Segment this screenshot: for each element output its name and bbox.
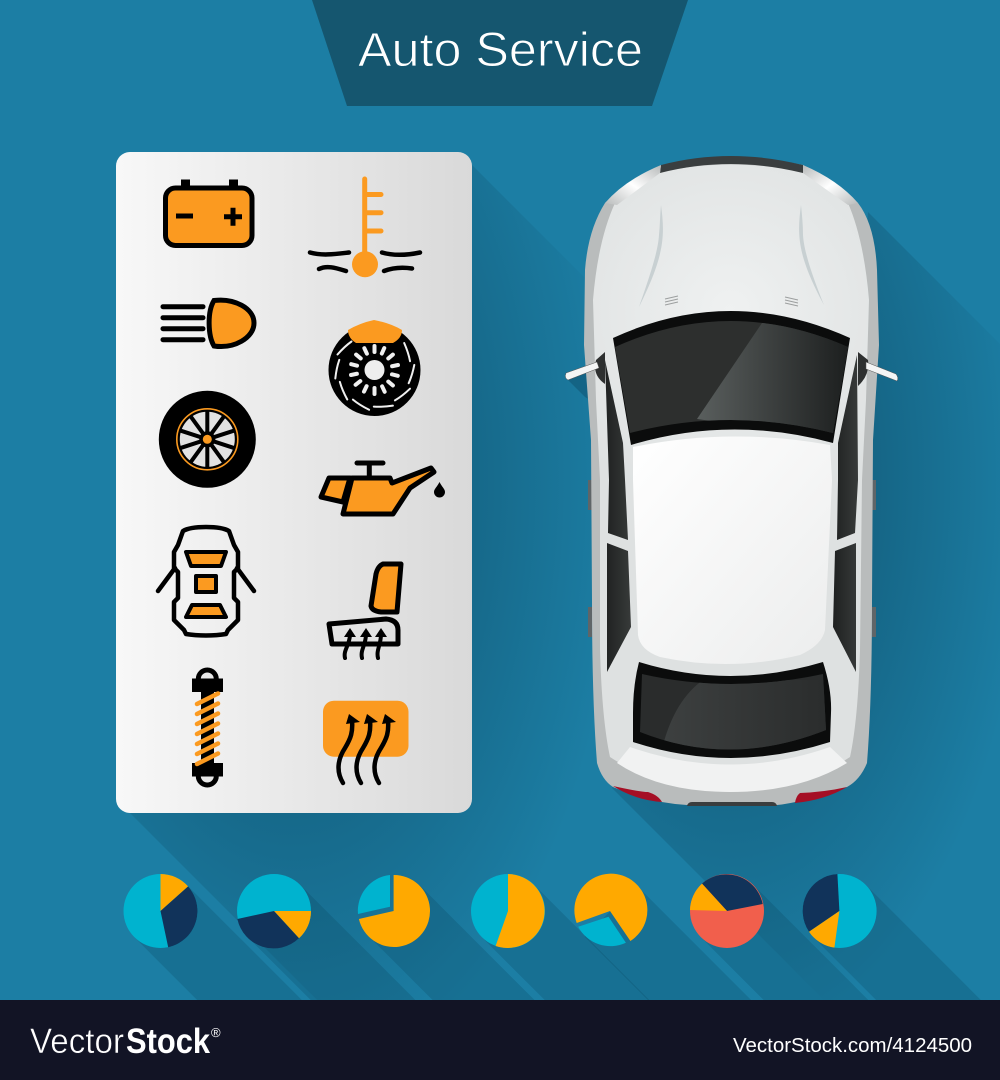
icon: rear defroster	[323, 701, 408, 783]
title banner	[312, 0, 688, 106]
right headlight	[803, 165, 858, 205]
pie chart 3	[358, 875, 430, 947]
icon: battery	[166, 180, 252, 246]
title: Auto Service	[358, 24, 643, 77]
icon: coolant temperature	[310, 179, 420, 277]
left headlight	[605, 165, 661, 205]
icon: car doors	[158, 527, 254, 636]
icon: headlight	[163, 300, 254, 346]
watermark logo: Stock	[126, 1022, 210, 1061]
icon: brake disc	[328, 320, 421, 416]
car top view	[565, 156, 898, 806]
rear bumper step	[687, 802, 777, 806]
watermark bar	[0, 1000, 1000, 1080]
pie chart 1	[124, 874, 198, 948]
windshield	[613, 311, 850, 445]
pie shadows	[160, 911, 960, 1032]
watermark url: VectorStock.com/4124500	[733, 1035, 972, 1057]
rear glass	[640, 674, 826, 750]
panel long shadow	[130, 165, 1000, 1000]
left mirror	[565, 362, 599, 380]
pie chart 6	[690, 874, 764, 948]
icon: oil can	[321, 463, 445, 514]
right tail light	[795, 787, 847, 803]
windshield glass	[615, 321, 848, 433]
left pillar windows	[605, 360, 631, 672]
watermark logo: Vector	[30, 1022, 124, 1061]
windshield glare	[697, 323, 848, 432]
car body	[584, 158, 879, 805]
pie chart 7	[803, 874, 877, 948]
left mirror shadow	[566, 370, 590, 400]
right mirror	[866, 362, 898, 381]
rear deck	[617, 747, 847, 792]
right mirror base	[858, 352, 868, 386]
icon: heated seat	[329, 564, 401, 658]
car lighter body	[593, 164, 869, 792]
left tail light	[613, 786, 662, 802]
watermark logo: ®	[211, 1025, 221, 1040]
front grille	[660, 156, 803, 173]
icon: shock absorber	[192, 670, 223, 785]
rear glass glare	[664, 680, 826, 750]
rear window	[633, 662, 831, 758]
car long shadow	[612, 212, 1000, 1000]
left mirror base	[595, 352, 605, 384]
right pillar windows	[833, 355, 858, 672]
hood vents	[665, 296, 798, 306]
hood creases	[639, 205, 824, 307]
roof	[633, 436, 832, 664]
pie chart 4	[471, 874, 545, 948]
pie chart 5	[574, 874, 647, 946]
watermark logo	[30, 1022, 221, 1061]
panel: service icons	[116, 152, 472, 813]
pie chart 2	[237, 874, 311, 948]
icon: wheel	[159, 391, 256, 488]
car side tabs	[588, 480, 876, 637]
